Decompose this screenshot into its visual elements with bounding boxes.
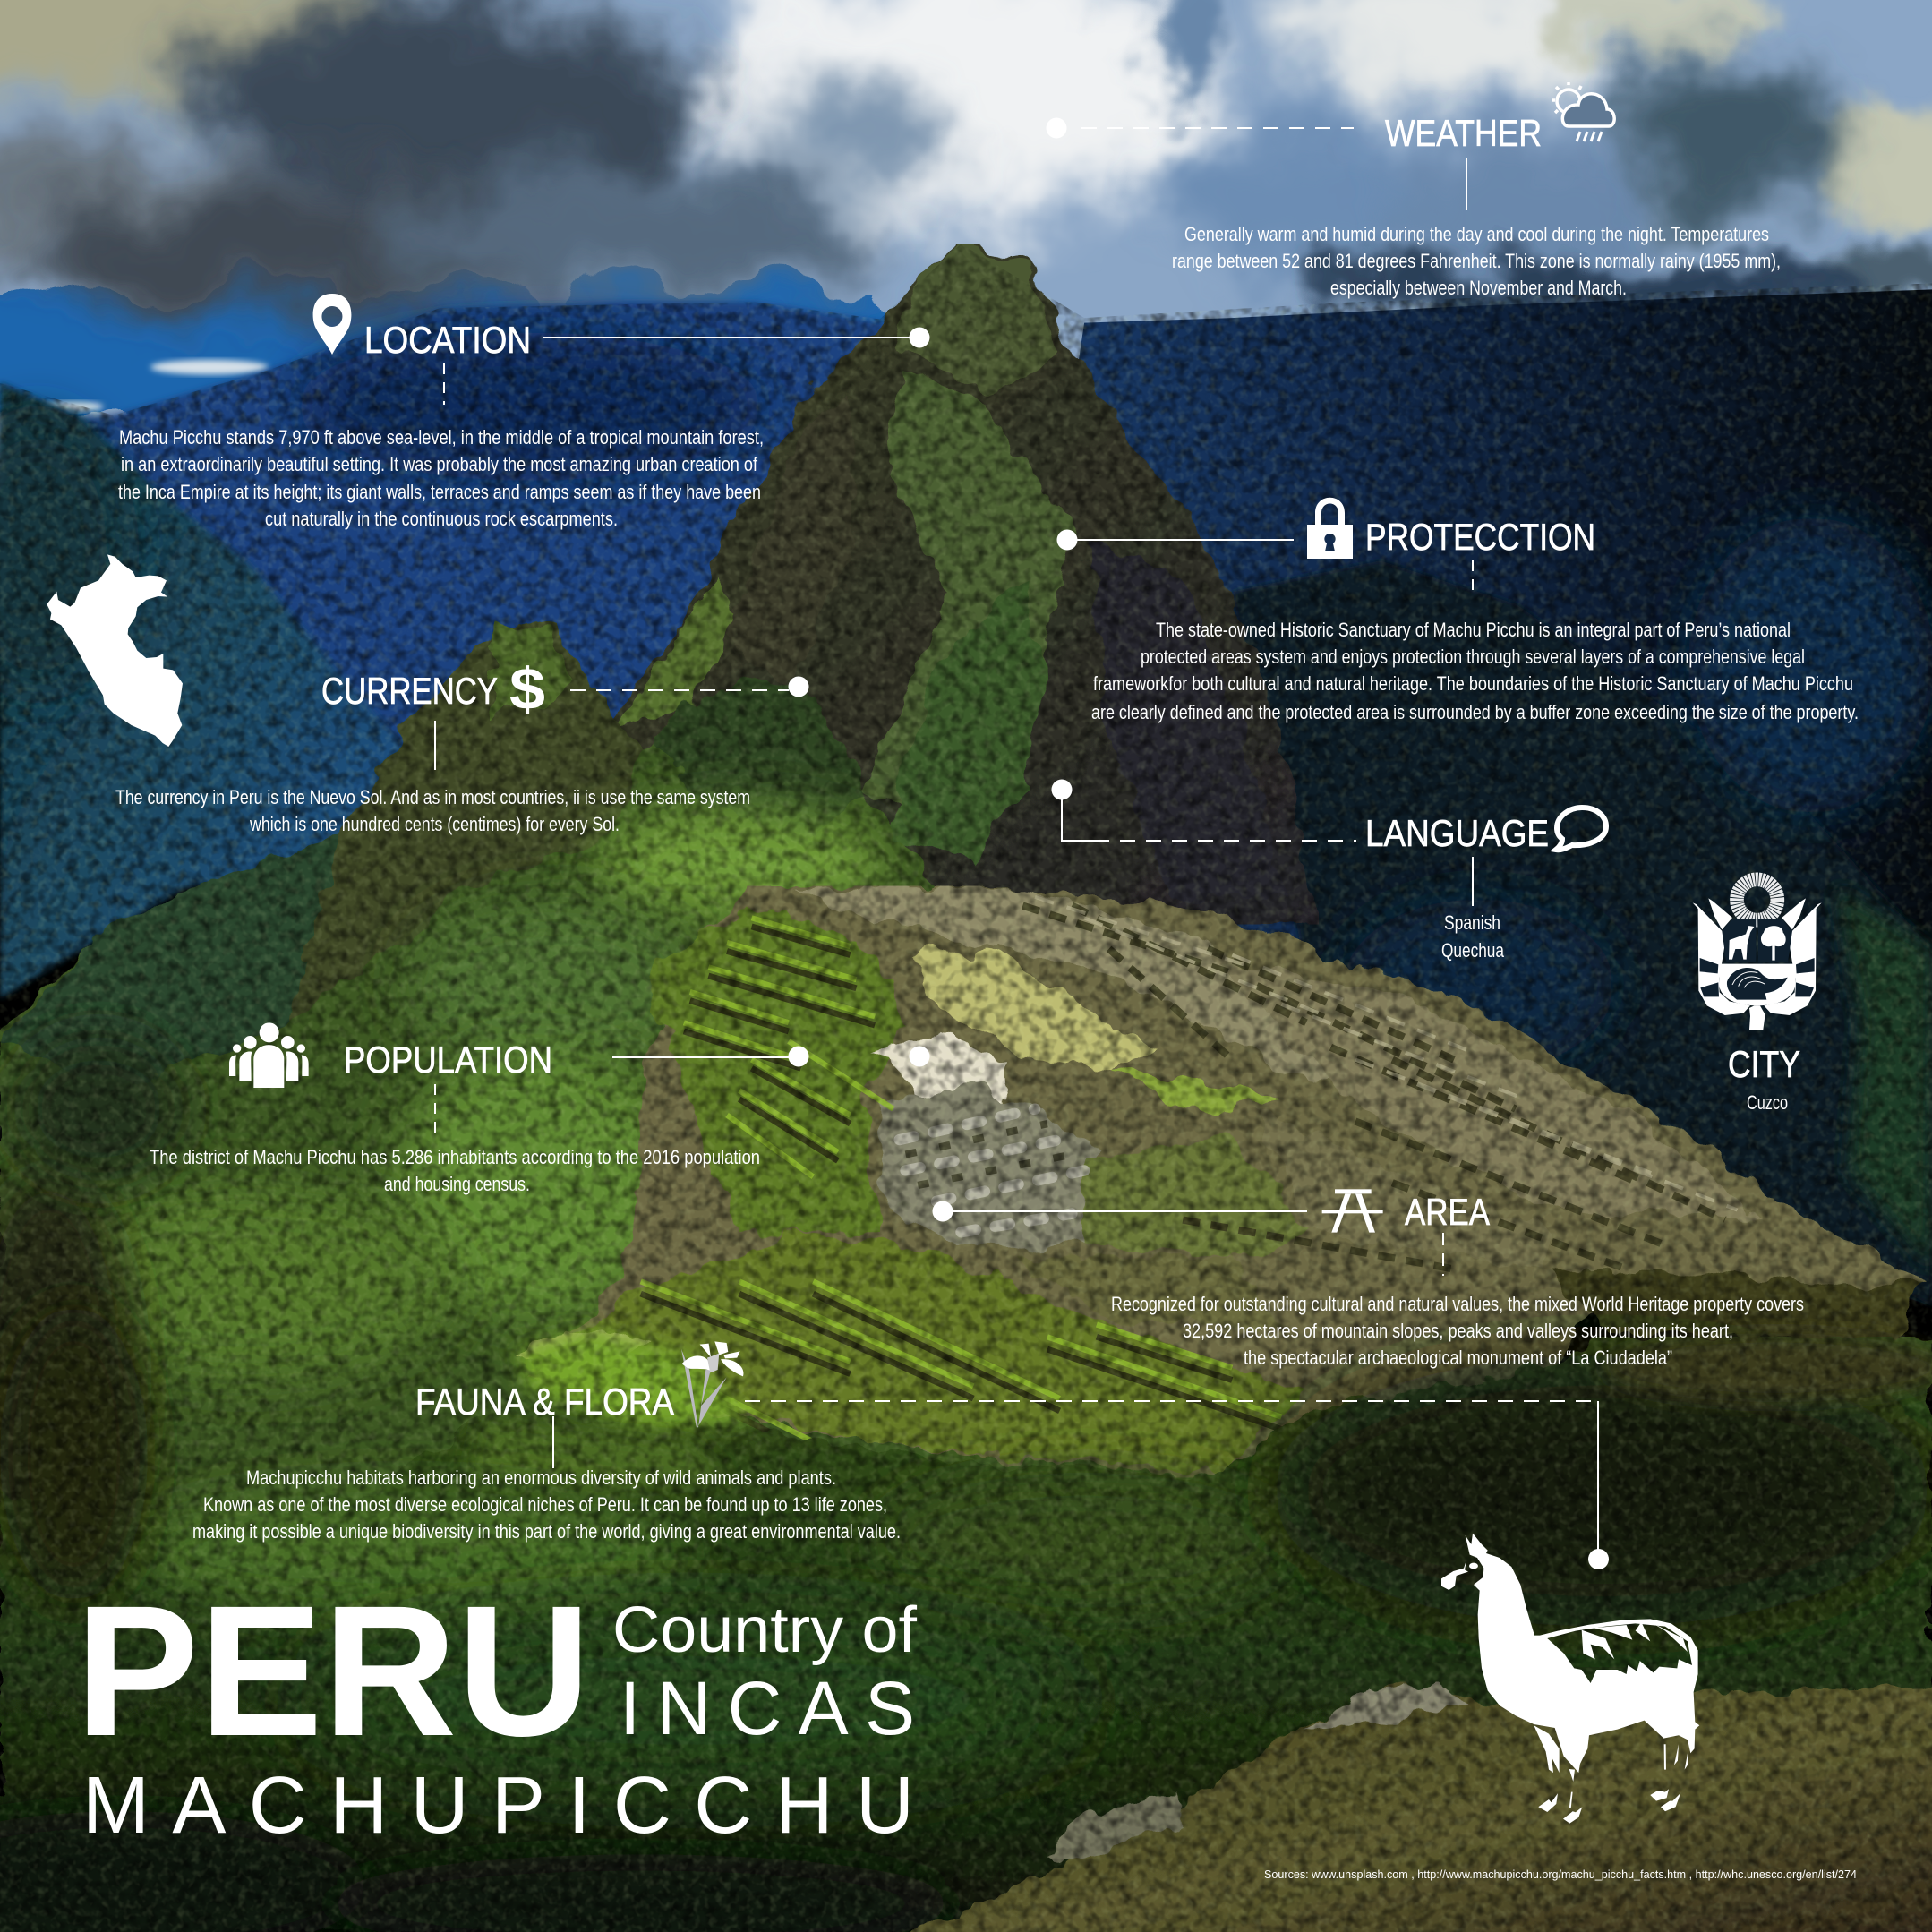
heading: area: AREA — [1405, 1191, 1490, 1233]
connector: currency — [435, 677, 809, 770]
icon: map pin — [313, 294, 351, 355]
icon: coat of arms of Peru — [1693, 879, 1822, 1030]
text: currency: which is one hundred cents (centimes) for every Sol. — [249, 813, 620, 835]
title block — [75, 1568, 918, 1851]
connector: fauna and flora — [553, 1401, 1609, 1569]
heading: language: LANGUAGE — [1365, 812, 1549, 854]
text: currency — [115, 786, 750, 835]
terraces and walls detail — [530, 897, 1738, 1454]
icon: llama — [1441, 1534, 1699, 1824]
Machu Picchu ruins and terraces — [515, 886, 1926, 1477]
text: population: and housing census. — [384, 1173, 530, 1195]
text: population: The district of Machu Picchu has 5.286 inhabitants according to the 2016 population — [150, 1146, 760, 1168]
text: weather — [1172, 223, 1781, 299]
text: city: Cuzco — [1747, 1091, 1788, 1114]
section: fauna and flora — [192, 1341, 1609, 1569]
section: currency — [115, 655, 809, 835]
section: protection — [1056, 498, 1859, 723]
foreground forest — [0, 1337, 1932, 1932]
hillside light and shade — [0, 807, 887, 1589]
text: protection: The state-owned Historic Sanctuary of Machu Picchu is an integral part of Peru’s national — [1156, 619, 1791, 641]
icon: speech bubble — [1556, 808, 1606, 850]
section: location — [118, 294, 929, 530]
text: location: Machu Picchu stands 7,970 ft above sea-level, in the middle of a tropical mountain forest, — [119, 426, 764, 449]
text: location: cut naturally in the continuous rock escarpments. — [265, 508, 618, 530]
bottom-right ground and rocks — [900, 1682, 1932, 1932]
connector: weather — [1046, 118, 1466, 210]
connector: population — [435, 1046, 929, 1140]
distant mountains — [0, 289, 1932, 1306]
text: fauna and flora — [192, 1466, 901, 1543]
section: weather — [1046, 82, 1781, 299]
text: location — [118, 426, 764, 530]
heading: city: CITY — [1728, 1043, 1800, 1085]
section: population — [150, 1022, 929, 1195]
icon: flower — [681, 1341, 743, 1429]
text: area: 32,592 hectares of mountain slopes, peaks and valleys surrounding its heart, — [1183, 1320, 1733, 1342]
forest light and shade — [0, 1306, 1932, 1932]
connector: protection — [1056, 530, 1473, 597]
connector: area — [933, 1201, 1443, 1276]
text: area: the spectacular archaeological monument of “La Ciudadela” — [1244, 1346, 1672, 1369]
text: protection — [1091, 619, 1859, 723]
text: language: Quechua — [1441, 939, 1505, 962]
text: fauna and flora: Known as one of the most diverse ecological niches of Peru. It can be found up to 13 life zones, — [203, 1493, 887, 1516]
text: location: in an extraordinarily beautiful setting. It was probably the most amazing urban creation of — [121, 453, 758, 475]
icon: dollar sign: $ — [509, 655, 545, 722]
section: city — [1693, 879, 1822, 1114]
heading: protection: PROTECCTION — [1365, 516, 1595, 558]
white cloud wisps — [39, 360, 269, 412]
text: area — [1111, 1293, 1804, 1369]
text: location: the Inca Empire at its height; its giant walls, terraces and ramps seem as if they have been — [118, 481, 761, 503]
left peaks and green hillside — [0, 616, 1355, 1932]
icon: map of Peru — [47, 554, 183, 747]
heading: currency: CURRENCY — [321, 670, 498, 712]
icon: group of people — [229, 1022, 309, 1088]
text: weather: Generally warm and humid during the day and cool during the night. Temperatures — [1184, 223, 1769, 245]
sky and clouds — [0, 0, 1932, 493]
heading: population: POPULATION — [344, 1039, 552, 1081]
icon: picnic table — [1322, 1189, 1383, 1233]
section: area — [933, 1189, 1804, 1369]
title: Peru: PERU — [75, 1568, 591, 1775]
text: population — [150, 1146, 760, 1195]
subtitle: Incas: INCAS — [620, 1666, 915, 1750]
Huayna Picchu peak — [603, 244, 1319, 924]
icon: padlock — [1307, 498, 1353, 559]
icon: sun cloud rain — [1552, 82, 1614, 141]
text: weather: especially between November and March. — [1330, 277, 1627, 299]
subtitle: Machupicchu: MACHUPICCHU — [82, 1761, 914, 1851]
sources: Sources: www.unsplash.com , http://www.machupicchu.org/machu_picchu_facts.htm , http://whc.unesco.org/en/list/274 — [1264, 1868, 1857, 1881]
text: currency: The currency in Peru is the Nuevo Sol. And as in most countries, ii is use the same system — [115, 786, 750, 808]
text: language: Spanish — [1444, 911, 1500, 934]
heading: fauna and flora: FAUNA & FLORA — [415, 1381, 674, 1423]
text: fauna and flora: making it possible a unique biodiversity in this part of the world, giving a great environmental value. — [192, 1520, 901, 1543]
connector: location — [444, 328, 929, 405]
subtitle: Country of: Country of — [612, 1594, 918, 1666]
heading: location: LOCATION — [364, 319, 531, 361]
text: language — [1441, 911, 1505, 962]
heading: weather: WEATHER — [1385, 112, 1542, 154]
connector: language — [1051, 779, 1473, 906]
text: weather: range between 52 and 81 degrees Fahrenheit. This zone is normally rainy (1955 mm), — [1172, 250, 1781, 272]
text: fauna and flora: Machupicchu habitats harboring an enormous diversity of wild animals and plants. — [246, 1466, 836, 1489]
section: language — [1051, 779, 1606, 962]
